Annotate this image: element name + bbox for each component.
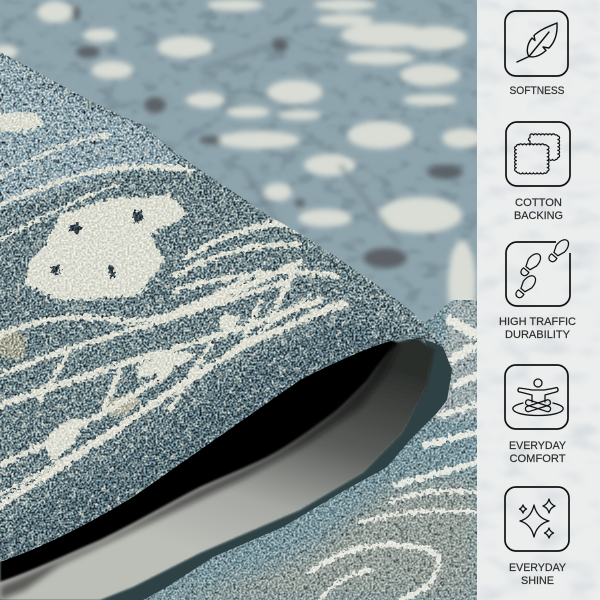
label: high traffic durability [499, 316, 576, 341]
label: everyday shine [509, 562, 567, 587]
dark hem band [0, 325, 452, 600]
label: high traffic durability: HIGH TRAFFIC [499, 316, 576, 328]
icon: sparkles [505, 487, 569, 551]
label: everyday shine: EVERYDAY [509, 562, 567, 574]
rug flecks [0, 54, 443, 560]
label: everyday shine: SHINE [521, 575, 554, 587]
feature: high traffic durability [499, 237, 576, 341]
rug top surface [0, 52, 443, 562]
feature: cotton backing [506, 122, 570, 222]
rug floor background [0, 0, 477, 600]
rug cream motifs [0, 112, 345, 505]
icon: feather [505, 11, 568, 76]
icon: cotton squares [506, 122, 570, 186]
label: high traffic durability: DURABILITY [505, 329, 571, 341]
label: cotton backing: BACKING [514, 210, 563, 222]
feature panel background [477, 0, 600, 600]
label: cotton backing: COTTON [515, 197, 562, 209]
icon: footprints [506, 237, 571, 306]
icon: meditating figure [505, 365, 568, 429]
feature: everyday shine [505, 487, 569, 587]
feature: everyday comfort [505, 365, 568, 465]
feature: softness [505, 11, 568, 97]
rug pile grain [0, 52, 443, 562]
label: everyday comfort: COMFORT [510, 453, 566, 465]
rolled rug [0, 52, 452, 600]
label: cotton backing [514, 197, 563, 222]
inner shadow on lining [0, 344, 400, 600]
lower right rug pattern [90, 295, 480, 600]
label: everyday comfort [509, 440, 567, 465]
black interior [0, 330, 398, 582]
hole and lining [0, 330, 435, 600]
label: softness: SOFTNESS [510, 85, 564, 97]
label: everyday comfort: EVERYDAY [509, 440, 567, 452]
